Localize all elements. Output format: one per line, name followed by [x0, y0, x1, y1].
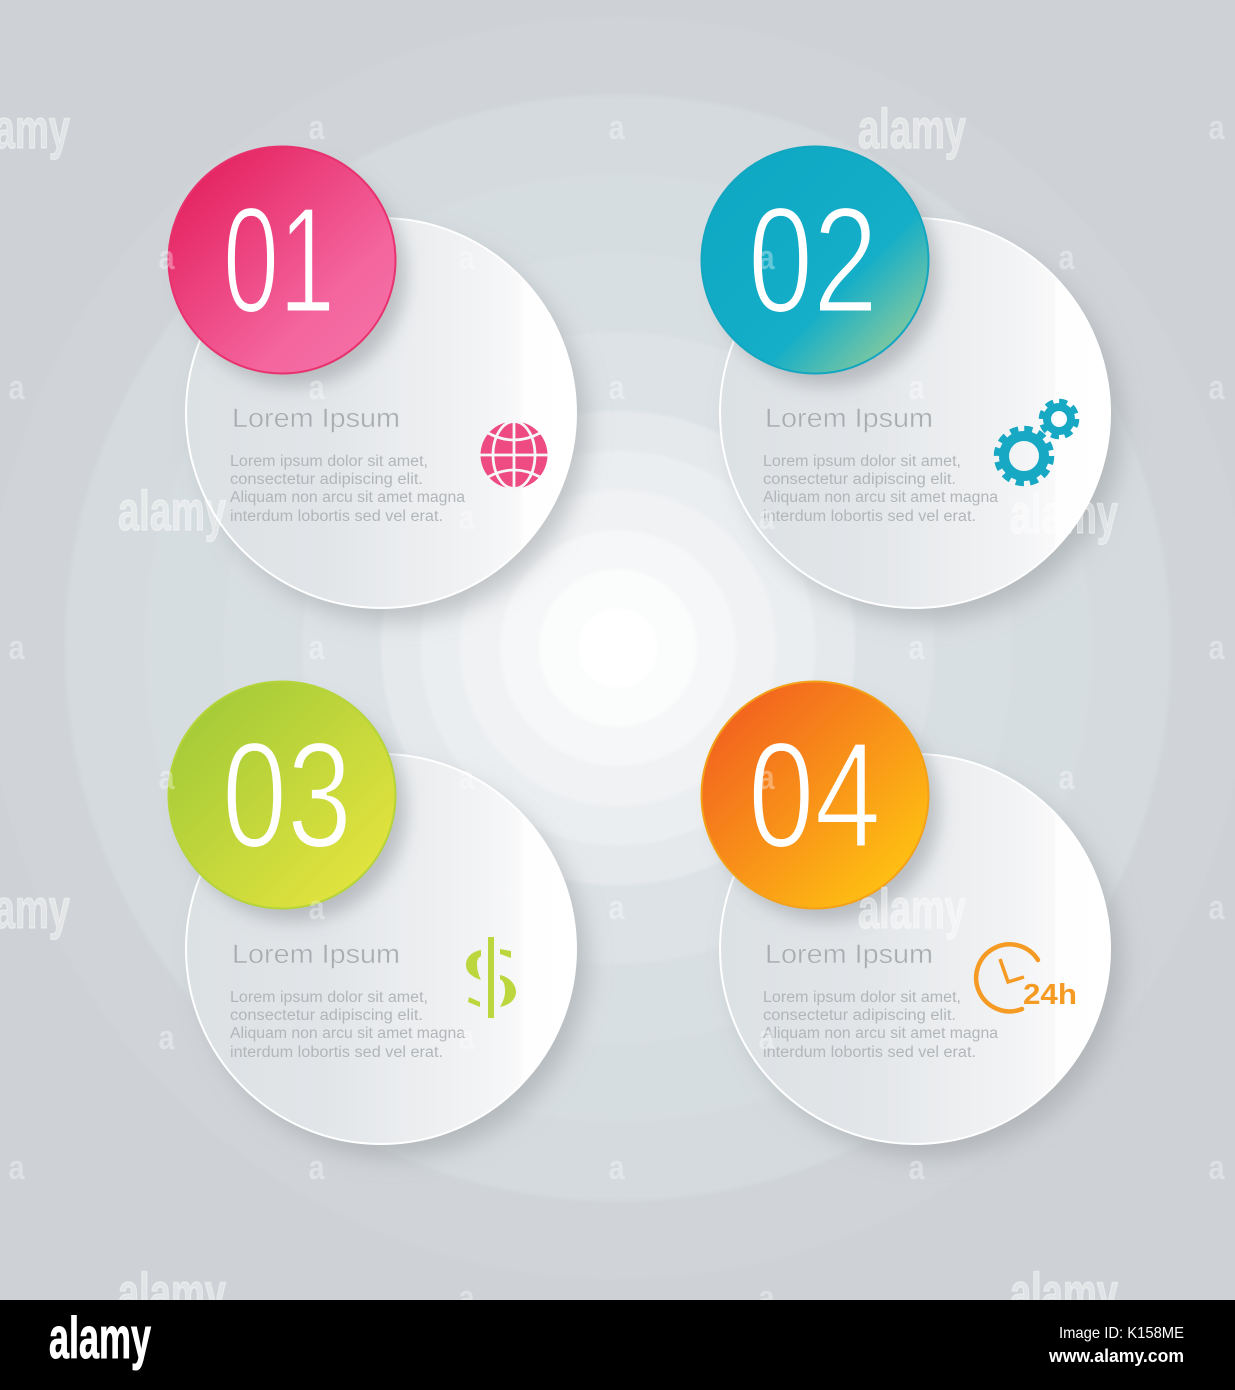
watermark: small repeated marks: a [308, 108, 325, 147]
badge 02 [702, 146, 939, 386]
watermark: small repeated marks: a [308, 1148, 325, 1187]
watermark: large alamy logos: alamy [118, 1261, 226, 1324]
badge 03: 03 [222, 710, 352, 879]
heading 03: Lorem Ipsum [232, 939, 400, 969]
panel: 01 [168, 146, 587, 621]
body text 01: Aliquam non arcu sit amet magna [230, 489, 465, 506]
watermark: small repeated marks: a [458, 1278, 475, 1317]
watermark: small repeated marks: a [458, 238, 475, 277]
body text 03: interdum lobortis sed vel erat. [230, 1044, 443, 1061]
watermark: small repeated marks: a [1208, 628, 1225, 667]
badge 02: 02 [748, 175, 878, 344]
watermark: small repeated marks: a [458, 498, 475, 537]
watermark: small repeated marks: a [608, 628, 625, 667]
card 01 circle [186, 218, 587, 621]
watermark: small repeated marks: a [8, 1148, 25, 1187]
website: www.alamy.com [1048, 1346, 1184, 1366]
watermark: small repeated marks: a [458, 758, 475, 797]
body text 03: consectetur adipiscing elit. [230, 1007, 423, 1024]
panel: 04 [702, 682, 1121, 1157]
body text 04: Lorem ipsum dolor sit amet, [763, 989, 961, 1006]
watermark: large alamy logos: alamy [858, 877, 966, 940]
body text 04: consectetur adipiscing elit. [763, 1007, 956, 1024]
watermark: small repeated marks: a [908, 368, 925, 407]
watermark: small repeated marks: a [758, 1018, 775, 1057]
watermark: small repeated marks: a [8, 368, 25, 407]
watermark: small repeated marks: a [608, 888, 625, 927]
watermark: small repeated marks: a [158, 238, 175, 277]
watermark: small repeated marks: a [8, 628, 25, 667]
body text 01 [230, 453, 465, 525]
watermark: small repeated marks: a [758, 238, 775, 277]
watermark: small repeated marks: a [908, 628, 925, 667]
body text 04: Aliquam non arcu sit amet magna [763, 1025, 998, 1042]
icon: dollar [466, 937, 516, 1018]
body text 04: interdum lobortis sed vel erat. [763, 1044, 976, 1061]
body text 03: Lorem ipsum dolor sit amet, [230, 989, 428, 1006]
badge 04: 04 [748, 710, 881, 879]
body text 03 [230, 989, 465, 1061]
body text 04 [763, 989, 998, 1061]
body text 02: Aliquam non arcu sit amet magna [763, 489, 998, 506]
watermark: small repeated marks: a [608, 108, 625, 147]
card 03 circle [186, 754, 587, 1157]
watermark: small repeated marks: a [458, 1018, 475, 1057]
body text 01: interdum lobortis sed vel erat. [230, 508, 443, 525]
watermark: small repeated marks: a [1208, 1148, 1225, 1187]
heading 02: Lorem Ipsum [765, 403, 933, 433]
body text 02 [763, 453, 998, 525]
body text 02: consectetur adipiscing elit. [763, 471, 956, 488]
badge 04 [702, 682, 939, 921]
watermark: small repeated marks: a [608, 1148, 625, 1187]
heading 04: Lorem Ipsum [765, 939, 933, 969]
panel: 03 [168, 682, 587, 1157]
watermark: small repeated marks: a [158, 758, 175, 797]
icon: clock 24h [976, 944, 1077, 1011]
watermark: large alamy logos: alamy [858, 97, 966, 160]
watermark: small repeated marks: a [1058, 238, 1075, 277]
watermark: large alamy logos [0, 97, 1118, 1324]
body text 02: Lorem ipsum dolor sit amet, [763, 453, 961, 470]
badge 03 [168, 682, 406, 921]
card 02 circle [720, 218, 1121, 621]
watermark: small repeated marks: a [308, 888, 325, 927]
body text 01: Lorem ipsum dolor sit amet, [230, 453, 428, 470]
badge 01: 01 [223, 175, 335, 344]
image id: Image ID: K158ME [1059, 1325, 1184, 1342]
watermark: small repeated marks: a [308, 368, 325, 407]
watermark: small repeated marks: a [1208, 368, 1225, 407]
heading 01: Lorem Ipsum [232, 403, 400, 433]
body text 01: consectetur adipiscing elit. [230, 471, 423, 488]
footer logo: alamy [49, 1306, 151, 1371]
watermark: small repeated marks: a [1058, 758, 1075, 797]
watermark: large alamy logos: alamy [118, 479, 226, 542]
watermark: large alamy logos: alamy [1010, 482, 1118, 545]
watermark: small repeated marks: a [758, 1278, 775, 1317]
watermark: small repeated marks: a [608, 368, 625, 407]
watermark: small repeated marks: a [758, 758, 775, 797]
watermark: small repeated marks: a [758, 498, 775, 537]
watermark: small repeated marks: a [1058, 1018, 1075, 1057]
card 04 circle [720, 754, 1121, 1157]
icon: globe [480, 421, 548, 489]
body text 03: Aliquam non arcu sit amet magna [230, 1025, 465, 1042]
badge 01 [168, 146, 406, 386]
watermark: small repeated marks: a [308, 628, 325, 667]
watermark: small repeated marks: a [1208, 888, 1225, 927]
footer bar [0, 1300, 1235, 1390]
panel: 02 [702, 146, 1121, 621]
watermark: small repeated marks: a [1208, 108, 1225, 147]
body text 02: interdum lobortis sed vel erat. [763, 508, 976, 525]
watermark: small repeated marks: a [908, 1148, 925, 1187]
watermark: large alamy logos: alamy [1010, 1261, 1118, 1324]
icon: gears [998, 402, 1076, 482]
icon: clock 24h: 24h [1023, 979, 1077, 1011]
watermark: small repeated marks: a [158, 1018, 175, 1057]
